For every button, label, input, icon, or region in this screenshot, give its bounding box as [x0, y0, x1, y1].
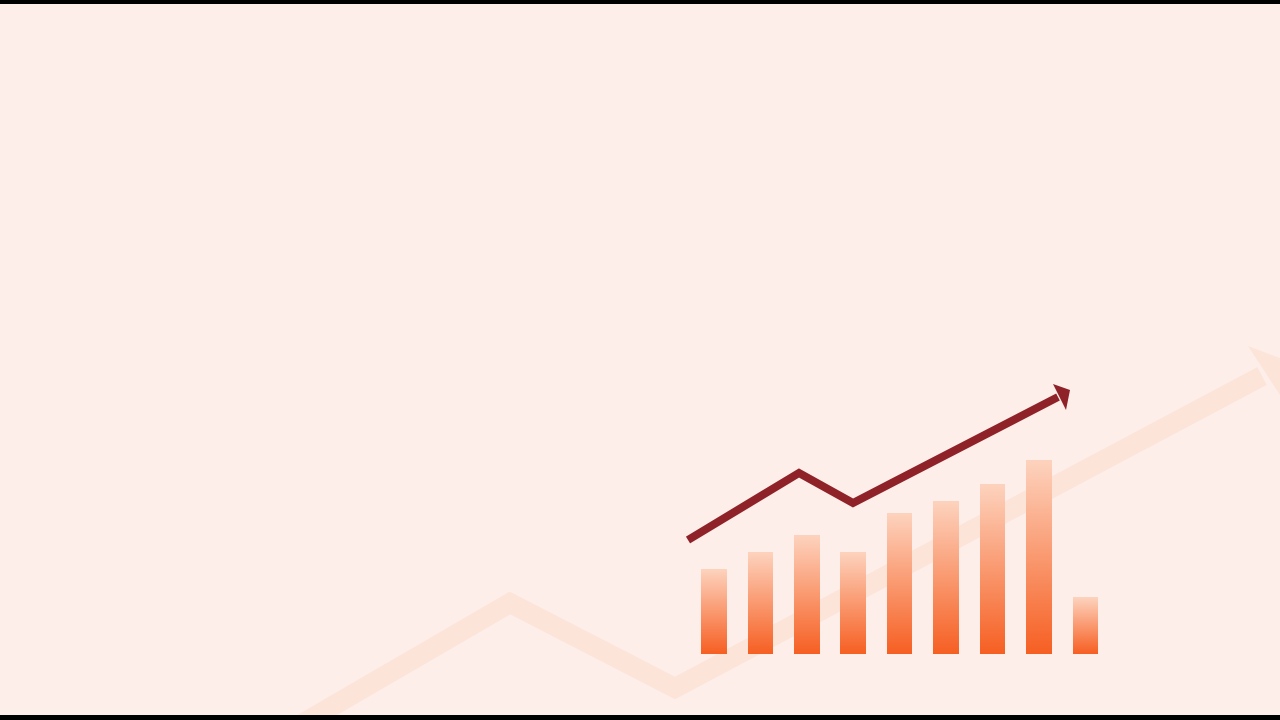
letterbox bars: [0, 0, 1280, 4]
bar chart: [701, 460, 1098, 654]
background arrow: [300, 346, 1280, 720]
trend arrow: [688, 384, 1070, 540]
